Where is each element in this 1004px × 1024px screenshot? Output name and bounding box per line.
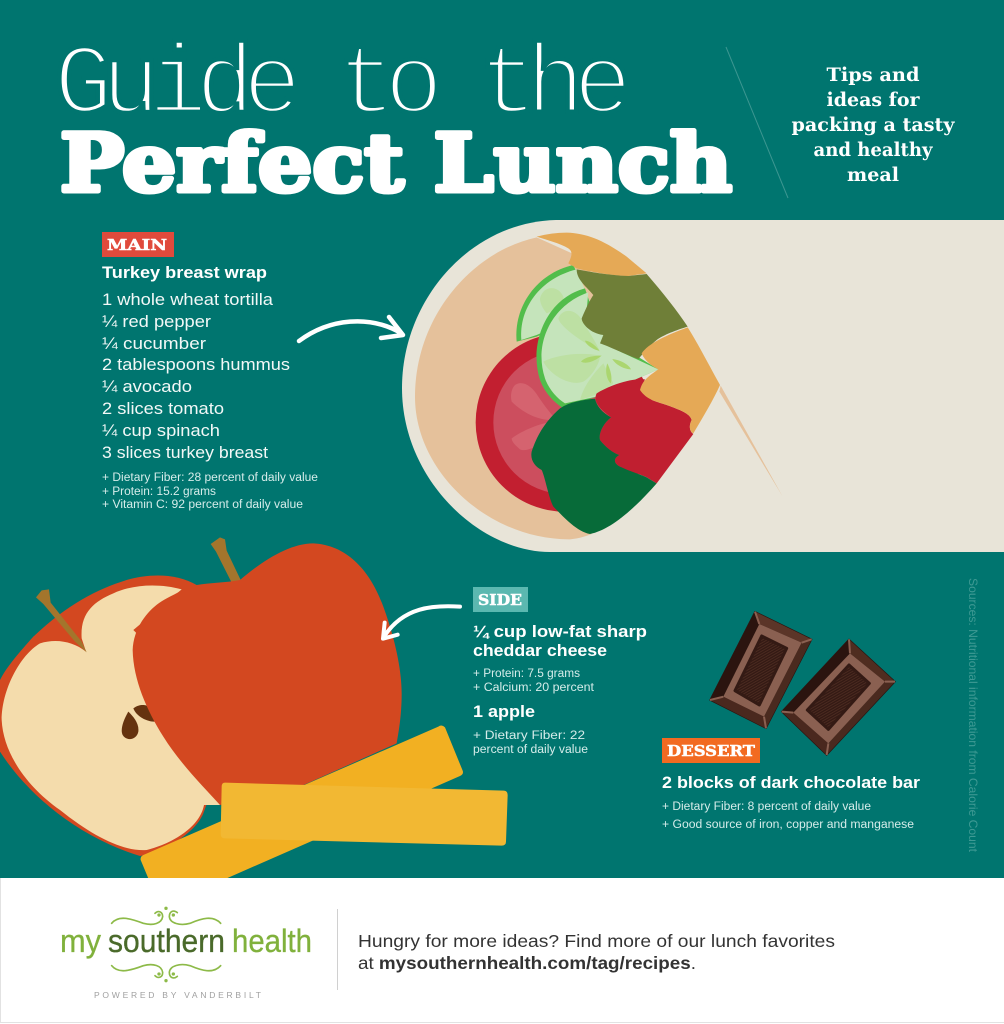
back cucumber slice <box>516 265 593 342</box>
red pepper layer <box>595 379 693 483</box>
logo wordmark: health <box>232 923 312 959</box>
footer background <box>0 878 1004 1024</box>
cheese nutrition notes: + Calcium: 20 percent <box>473 682 595 694</box>
chocolate piece one <box>710 612 812 728</box>
subtitle: tips and ideas: Tips and <box>826 64 920 86</box>
cut apple flesh <box>2 585 220 850</box>
illustration: apple and cheese <box>0 537 508 878</box>
dessert nutrition notes: + Dietary Fiber: 8 percent of daily value <box>662 801 871 813</box>
subtitle: tips and ideas: ideas for <box>826 89 920 111</box>
cut apple stem <box>36 589 87 652</box>
footer call to action <box>358 931 835 973</box>
subtitle: tips and ideas <box>792 64 955 186</box>
orange pepper right <box>640 327 720 433</box>
side tag <box>473 587 528 612</box>
apple nutrition notes: percent of daily value <box>473 744 588 756</box>
main nutrition notes: + Dietary Fiber: 28 percent of daily value <box>102 472 318 484</box>
logo wordmark <box>60 923 312 959</box>
dessert tag: DESSERT <box>667 742 756 760</box>
ingredient list: 3 slices turkey breast <box>102 443 268 462</box>
panel: side <box>473 587 647 756</box>
dark green lettuce layer <box>531 399 657 534</box>
title line 1: Guide to the <box>54 31 632 142</box>
logo wordmark: southern <box>108 923 225 959</box>
dessert nutrition notes <box>662 801 914 831</box>
apple seeds <box>122 705 155 739</box>
footer divider <box>336 909 338 990</box>
arrow to wrap <box>299 317 403 341</box>
footer call to action: at mysouthernhealth.com/tag/recipes . <box>358 953 696 973</box>
cheese nutrition notes: + Protein: 7.5 grams <box>473 668 580 680</box>
ingredient list: ¼ avocado <box>102 377 192 396</box>
front cheese stick <box>221 783 508 846</box>
main tag <box>102 232 174 257</box>
footer call to action: Hungry for more ideas? Find more of our lunch favorites <box>358 931 835 951</box>
diagonal divider <box>726 47 788 198</box>
main nutrition notes: + Vitamin C: 92 percent of daily value <box>102 499 303 511</box>
ingredient list <box>102 290 290 462</box>
cheese nutrition notes <box>473 668 595 694</box>
main tag: MAIN <box>107 236 167 254</box>
title line 2: Perfect Lunch <box>60 116 732 210</box>
dessert nutrition notes: + Good source of iron, copper and manganese <box>662 819 914 831</box>
ingredient list: 2 slices tomato <box>102 399 224 418</box>
arrow to apple <box>383 606 460 639</box>
side tag: SIDE <box>478 591 522 609</box>
toothpick sliver <box>719 386 782 496</box>
side heading cheese <box>473 623 647 660</box>
wrap outer tortilla <box>402 220 1004 552</box>
spinach olive layer <box>577 269 688 359</box>
sources note: Sources: Nutritional information from Calorie Count <box>966 578 980 853</box>
dessert tag <box>662 738 760 763</box>
main nutrition notes: + Protein: 15.2 grams <box>102 486 216 498</box>
subtitle: tips and ideas: and healthy <box>814 139 933 161</box>
side heading apple: 1 apple <box>473 703 535 721</box>
back cheese stick <box>141 725 463 878</box>
cut apple skin <box>0 575 233 856</box>
subtitle: tips and ideas: meal <box>847 164 899 186</box>
dessert heading: 2 blocks of dark chocolate bar <box>662 774 921 792</box>
ingredient list: ¼ cucumber <box>102 334 206 353</box>
footer panel <box>0 878 1004 1024</box>
illustration: chocolate <box>710 612 895 755</box>
side heading cheese: cheddar cheese <box>473 642 607 660</box>
logo flourishes <box>112 907 221 982</box>
front cucumber slice <box>537 288 658 408</box>
logo wordmark: my <box>60 923 101 959</box>
subtitle: tips and ideas: packing a tasty <box>792 114 955 136</box>
chocolate piece two <box>782 639 895 755</box>
main heading: Turkey breast wrap <box>102 263 267 282</box>
logo <box>60 907 312 1000</box>
wrap interior in zoom coordinates <box>415 233 782 539</box>
whole apple <box>133 543 402 805</box>
main nutrition notes <box>102 472 318 511</box>
ingredient list: 2 tablespoons hummus <box>102 355 290 374</box>
side heading cheese: ¼ cup low-fat sharp <box>473 623 647 641</box>
apple nutrition notes: + Dietary Fiber: 22 <box>473 730 585 742</box>
title <box>54 31 732 210</box>
powered by: POWERED BY VANDERBILT <box>94 990 261 1000</box>
orange pepper top <box>537 233 647 276</box>
panel: main <box>102 232 318 511</box>
inner tortilla <box>415 237 633 539</box>
ingredient list: ¼ red pepper <box>102 312 211 331</box>
tomato slice <box>476 333 654 512</box>
ingredient list: ¼ cup spinach <box>102 421 220 440</box>
illustration: turkey wrap <box>402 220 1004 552</box>
whole apple stem <box>211 537 241 583</box>
apple nutrition notes <box>473 730 588 756</box>
panel: dessert <box>662 738 921 831</box>
ingredient list: 1 whole wheat tortilla <box>102 290 274 309</box>
